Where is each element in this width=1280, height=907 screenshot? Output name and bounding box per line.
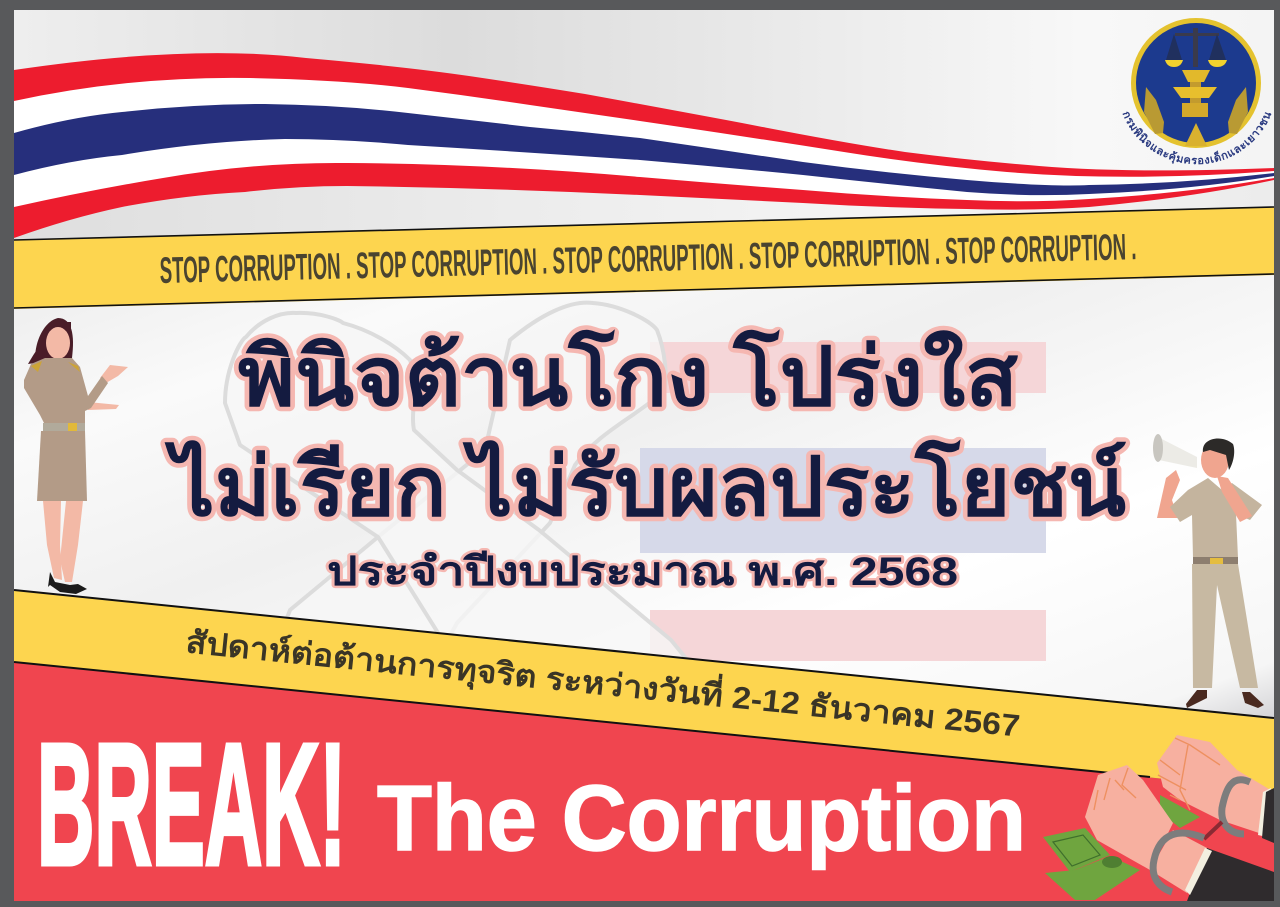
title line 2: ไม่เรียก ไม่รับผลประโยชน์	[164, 440, 1127, 533]
icon: department emblem	[1122, 18, 1272, 164]
panel: lower red band	[14, 662, 1274, 901]
title line 1: พินิจต้านโกง โปร่งใส	[238, 330, 1018, 423]
subtitle: fiscal year: ประจำปีงบประมาณ พ.ศ. 2568	[327, 550, 958, 594]
watermark: flag stripes	[640, 342, 1046, 661]
panel: lower yellow band	[14, 590, 1274, 790]
date line: สัปดาห์ต่อต้านการทุจริต ระหว่างวันที่ 2-12 ธันวาคม 2567	[184, 619, 1022, 746]
icon: cash notes	[1043, 795, 1200, 900]
flag ribbon	[14, 53, 1274, 245]
text: BREAK!	[37, 707, 346, 901]
icon: woman in uniform	[24, 318, 128, 594]
panel: upper yellow band	[14, 207, 1274, 309]
icon: man with megaphone	[1153, 434, 1264, 708]
panel: middle background	[14, 268, 1274, 725]
icon: handcuffed hands	[1085, 735, 1274, 901]
panel: top banner background	[14, 10, 1274, 245]
emblem caption: กรมพินิจและคุ้มครองเด็กและเยาวชน	[1122, 112, 1272, 164]
heading: The Corruption: The Corruption	[377, 766, 1026, 870]
watermark: crossed fists	[225, 303, 720, 700]
